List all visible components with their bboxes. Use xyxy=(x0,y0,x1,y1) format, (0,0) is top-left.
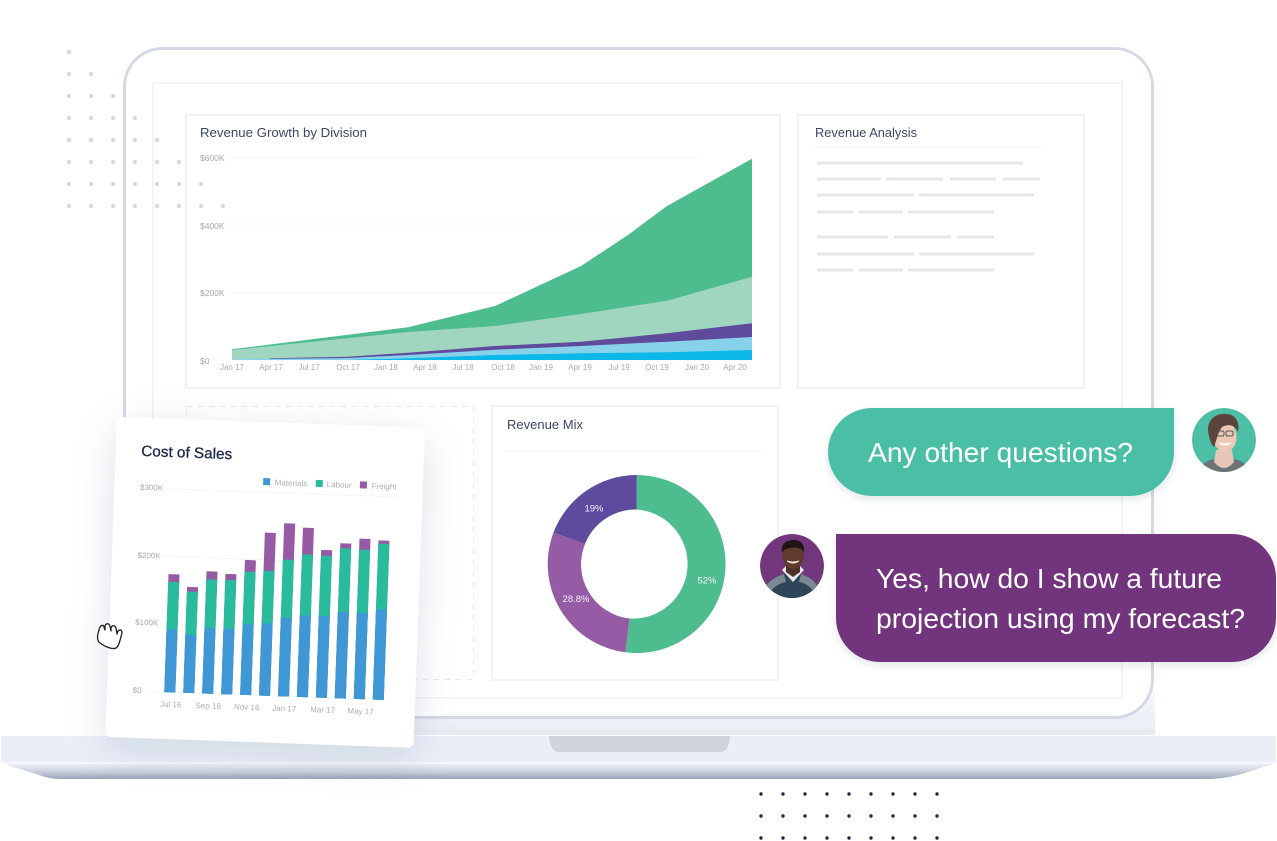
panel: empty dashed placeholder xyxy=(186,406,474,680)
donut chart: 19% xyxy=(584,504,604,514)
chat bubble: Any other questions? xyxy=(828,408,1174,496)
placeholder text lines xyxy=(817,162,1040,272)
area chart: Oct 18 xyxy=(491,363,515,372)
stacked bar chart: Mar 17 xyxy=(310,705,336,715)
stacked bar chart: $300K xyxy=(140,483,164,493)
area chart: Jul 17 xyxy=(298,363,320,372)
area chart: Oct 19 xyxy=(645,363,669,372)
donut chart: 28.8% xyxy=(563,594,590,605)
stacked bar chart xyxy=(132,483,398,717)
area chart: $600K xyxy=(200,153,225,163)
area chart: Oct 17 xyxy=(336,363,360,372)
donut chart xyxy=(548,475,726,653)
heading: Revenue Mix: Revenue Mix xyxy=(507,417,583,432)
area chart: Jul 18 xyxy=(452,363,474,372)
stacked bar chart: $0 xyxy=(133,686,142,695)
area chart: Apr 17 xyxy=(259,363,283,372)
legend: Freight xyxy=(372,482,398,492)
avatar: man xyxy=(760,534,824,600)
area chart: $0 xyxy=(200,356,210,366)
area chart: Apr 20 xyxy=(723,363,747,372)
panel: Revenue Analysis xyxy=(798,115,1084,388)
legend: Materials xyxy=(275,478,307,488)
area chart: $400K xyxy=(200,221,225,231)
area chart: Jan 19 xyxy=(529,363,554,372)
chat bubble: Yes, how do I show a future projection using my forecast? xyxy=(836,534,1276,662)
heading: Cost of Sales: Cost of Sales xyxy=(141,443,233,463)
icon: hand cursor xyxy=(98,624,122,649)
legend xyxy=(263,478,398,492)
stacked bar chart: Jan 17 xyxy=(272,704,297,714)
stacked bar chart: Jul 16 xyxy=(160,700,182,710)
decorative dot grid: top left xyxy=(67,50,225,208)
donut chart: 52% xyxy=(697,576,717,586)
area chart: Jan 20 xyxy=(685,363,710,372)
decorative dot grid: bottom xyxy=(759,792,939,840)
legend: Labour xyxy=(327,480,352,490)
heading: Revenue Analysis: Revenue Analysis xyxy=(815,125,917,140)
avatar: woman xyxy=(1192,408,1256,474)
chat bubble: Yes, how do I show a future projection using my forecast?: projection using my forecast? xyxy=(876,603,1245,634)
area chart: Jan 17 xyxy=(220,363,245,372)
chat bubble: Yes, how do I show a future projection using my forecast?: Yes, how do I show a future xyxy=(876,563,1222,594)
stacked bar chart: Nov 16 xyxy=(234,702,260,712)
stacked bar chart: $100K xyxy=(135,618,159,628)
area chart: Jul 19 xyxy=(608,363,630,372)
stacked bar chart: $200K xyxy=(137,551,162,561)
chat bubble: Any other questions?: Any other questions? xyxy=(868,437,1133,468)
area chart: Apr 18 xyxy=(413,363,437,372)
panel: Revenue Growth by Division xyxy=(186,115,780,388)
stacked bar chart: Sep 16 xyxy=(195,701,222,711)
heading: Revenue Growth by Division: Revenue Growth by Division xyxy=(200,125,367,140)
stacked bar chart: May 17 xyxy=(347,706,374,716)
area chart: $200K xyxy=(200,288,225,298)
area chart: Jan 18 xyxy=(374,363,399,372)
card: Cost of Sales xyxy=(106,417,425,748)
panel: Revenue Mix xyxy=(492,406,778,680)
area chart xyxy=(200,153,752,372)
area chart: Apr 19 xyxy=(568,363,592,372)
